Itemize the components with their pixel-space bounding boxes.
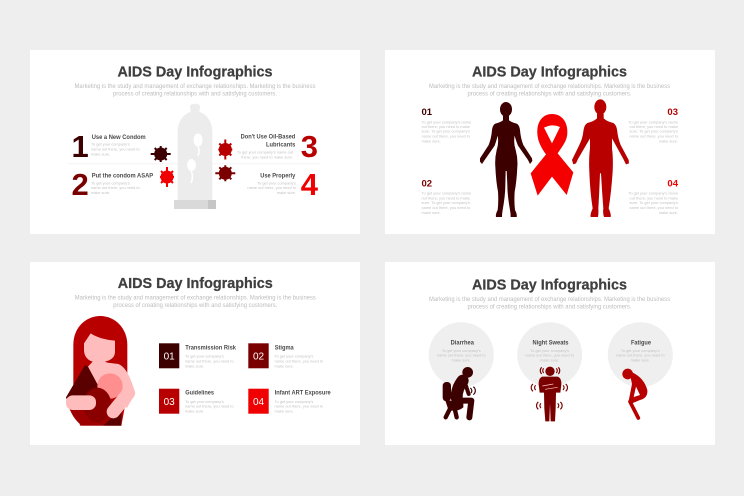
- item 01: make sure.: [422, 139, 441, 144]
- item 04: [628, 179, 679, 215]
- figure: woman: [480, 102, 532, 217]
- icon: condom: [174, 104, 216, 209]
- item 04: sure. To get your company's: [630, 200, 678, 205]
- item 04: name out there, you need to: [629, 205, 678, 210]
- subtitle: Marketing is the study and management of exchange relationships. Marketing is the business: [429, 83, 671, 90]
- panel: bodies and ribbon: [385, 50, 715, 234]
- subtitle: [429, 296, 671, 311]
- item 01: make sure.: [185, 363, 204, 368]
- icon: person on toilet: [443, 367, 475, 417]
- subtitle: Marketing is the study and management of exchange relationships. Marketing is the business: [74, 83, 316, 90]
- illustration: mother holding child: [66, 316, 135, 426]
- symptom: fatigue: [608, 322, 673, 418]
- icon: red ribbon: [531, 114, 573, 196]
- item 03: name out there, you need to: [185, 404, 234, 409]
- symptom: fatigue: To get your company's: [621, 348, 660, 353]
- item 03: To get your company's: [185, 399, 224, 404]
- subtitle: [429, 83, 671, 98]
- panel: condom tips: [30, 50, 360, 234]
- item 03: [159, 389, 234, 414]
- symptom: diarrhea: name out there, you need to: [437, 353, 486, 358]
- item 02: To get your company's name: [422, 191, 471, 196]
- figure: man: [572, 99, 629, 217]
- panel: mother and child: [30, 262, 360, 445]
- symptom: diarrhea: [429, 322, 494, 417]
- subtitle: process of creating relationships with and satisfying customers.: [468, 304, 632, 311]
- icon: virus 2: [160, 167, 174, 187]
- step 3: Don't Use Oil-Based: [241, 134, 295, 141]
- step 1: [72, 129, 146, 164]
- symptom: night sweats: Night Sweats: [532, 340, 569, 347]
- step 4: To get your company's: [257, 180, 296, 185]
- subtitle: process of creating relationships with and satisfying customers.: [113, 90, 277, 98]
- title: AIDS Day Infographics: [472, 276, 627, 294]
- item 01: Transmission Risk: [185, 344, 236, 351]
- item 02: name out there, you need to: [274, 358, 323, 363]
- step 4: 4: [301, 167, 319, 202]
- step 3: [237, 129, 318, 164]
- step 4: Use Properly: [260, 172, 296, 179]
- item 01: [159, 343, 236, 368]
- step 2: Put the condom ASAP: [92, 172, 154, 179]
- subtitle: [75, 294, 316, 309]
- symptom: night sweats: To get your company's: [530, 348, 569, 353]
- item 03: make sure.: [185, 409, 204, 414]
- icon: shivering person: [531, 367, 567, 421]
- icon: virus 4: [215, 165, 235, 181]
- symptom: diarrhea: Diarrhea: [451, 340, 474, 347]
- step 4: make sure.: [277, 190, 296, 195]
- item 01: name out there, you need to: [422, 134, 470, 139]
- item 03: out there, you need to make: [630, 124, 678, 129]
- item 02: [422, 179, 471, 215]
- item 04: To get your company's: [274, 399, 313, 404]
- item 02: 02: [422, 179, 432, 190]
- step 3: Lubricants: [266, 141, 296, 148]
- step 1: To get your company's: [91, 142, 130, 147]
- item 02: out there, you need to make: [422, 195, 470, 200]
- symptom: fatigue: make sure.: [631, 358, 650, 363]
- step 1: name out there, you need to: [91, 147, 140, 152]
- item 04: name out there, you need to: [274, 404, 323, 409]
- item 02: make sure.: [422, 210, 441, 215]
- item 01: To get your company's: [185, 354, 224, 359]
- subtitle: [74, 83, 316, 98]
- step 3: 3: [301, 129, 318, 164]
- symptom: diarrhea: To get your company's: [442, 348, 481, 353]
- title: AIDS Day Infographics: [118, 275, 273, 292]
- icon: slumped person: [622, 369, 647, 418]
- item 02: To get your company's: [274, 354, 313, 359]
- item 04: make sure.: [274, 409, 294, 414]
- item 03: [628, 107, 678, 144]
- item 02: [248, 343, 323, 368]
- step 1: Use a New Condom: [92, 134, 146, 141]
- item 02: make sure.: [274, 363, 294, 368]
- step 3: there, you need to make sure.: [241, 154, 293, 159]
- item 03: 03: [667, 107, 678, 118]
- item 04: To get your company's name: [628, 191, 678, 196]
- step 2: 2: [72, 167, 89, 202]
- title: AIDS Day Infographics: [472, 63, 627, 80]
- item 04: Infant ART Exposure: [275, 390, 331, 397]
- symptom: diarrhea: make sure.: [452, 358, 471, 363]
- step 4: [247, 167, 319, 202]
- step 4: name out there, you need to: [247, 185, 296, 190]
- symptom: fatigue: name out there, you need to: [616, 353, 665, 358]
- item 03: name out there, you need to: [629, 134, 678, 139]
- subtitle: Marketing is the study and management of exchange relationships. Marketing is the business: [75, 294, 316, 302]
- item 01: 01: [164, 352, 175, 362]
- item 01: [422, 107, 471, 144]
- title: AIDS Day Infographics: [118, 63, 272, 80]
- item 03: make sure.: [659, 139, 678, 144]
- item 03: 03: [164, 397, 175, 408]
- icon: virus 3: [218, 140, 232, 160]
- symptom: night sweats: name out there, you need to: [525, 353, 574, 358]
- item 03: Guidelines: [185, 390, 214, 397]
- item 03: sure. To get your company's: [630, 129, 678, 134]
- item 03: To get your company's name: [628, 119, 678, 124]
- item 04: [248, 389, 331, 414]
- item 01: sure. To get your company's: [422, 129, 470, 134]
- step 3: To get your company's name out: [237, 150, 294, 155]
- subtitle: process of creating relationships with and satisfying customers.: [113, 302, 277, 309]
- item 01: 01: [422, 107, 433, 118]
- step 2: name out there, you need to: [91, 185, 140, 190]
- item 01: out there, you need to make: [422, 124, 470, 129]
- icon: virus 1: [151, 146, 171, 162]
- subtitle: process of creating relationships with and satisfying customers.: [468, 90, 632, 98]
- symptom: night sweats: [517, 322, 582, 421]
- item 04: 04: [253, 397, 264, 408]
- item 02: Stigma: [275, 344, 294, 351]
- item 02: 02: [253, 352, 264, 362]
- item 04: out there, you need to make: [630, 195, 678, 200]
- subtitle: Marketing is the study and management of exchange relationships. Marketing is the business: [429, 296, 671, 303]
- item 01: name out there, you need to: [185, 358, 234, 363]
- step 2: [72, 167, 154, 202]
- step 2: make sure.: [91, 190, 110, 195]
- item 01: To get your company's name: [422, 119, 471, 124]
- symptom: night sweats: make sure.: [540, 358, 559, 363]
- item 04: 04: [667, 179, 679, 190]
- panel: symptoms: [385, 262, 715, 445]
- item 02: sure. To get your company's: [422, 200, 470, 205]
- step 2: To get your company's: [91, 180, 130, 185]
- item 02: name out there, you need to: [422, 205, 470, 210]
- symptom: fatigue: Fatigue: [631, 340, 651, 347]
- item 04: make sure.: [659, 210, 678, 215]
- step 1: 1: [72, 129, 89, 164]
- step 1: make sure.: [91, 152, 110, 157]
